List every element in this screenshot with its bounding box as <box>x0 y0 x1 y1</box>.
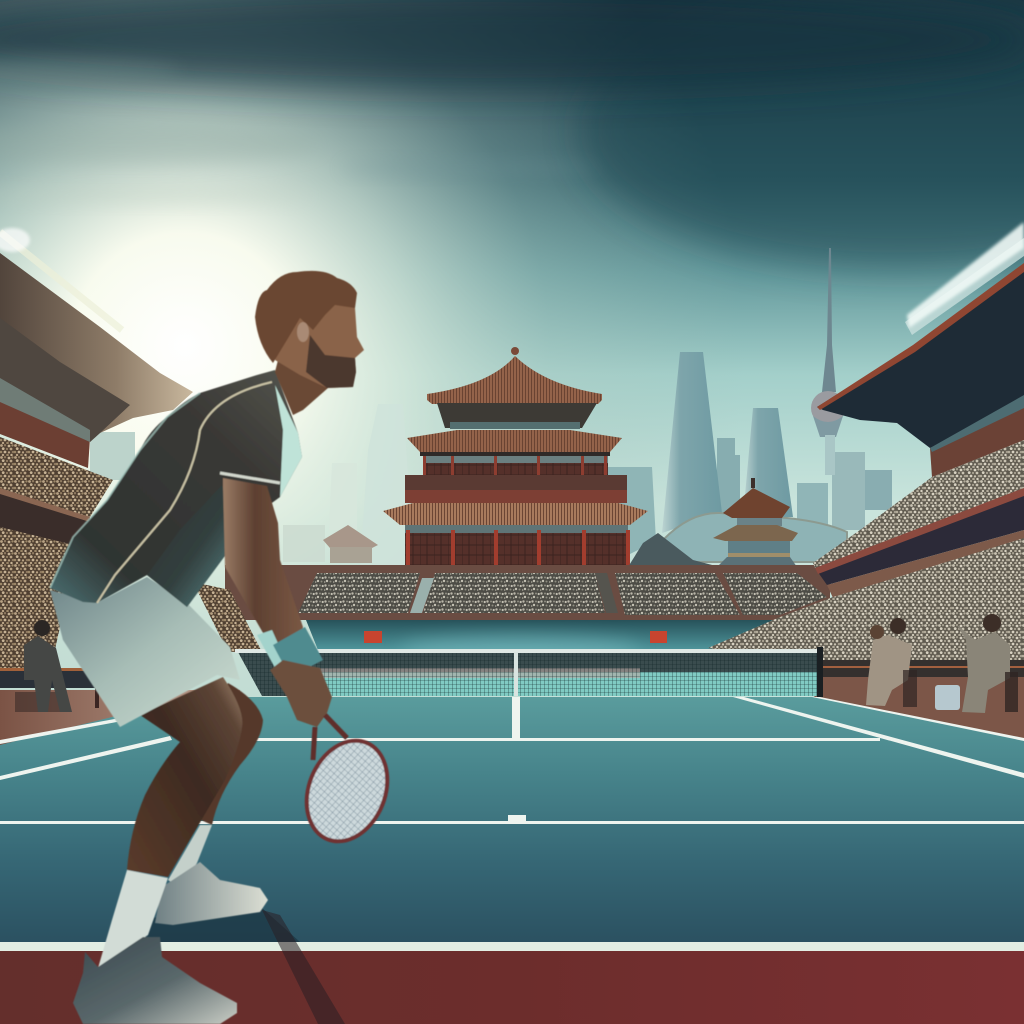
small pagoda left <box>323 525 378 563</box>
hand <box>270 660 332 727</box>
side ground strips <box>0 677 1024 745</box>
back shoe <box>155 862 268 925</box>
back leg <box>190 683 263 825</box>
central teal wall with flags <box>306 620 780 664</box>
sky background <box>0 0 1024 720</box>
shirt lower front panel <box>147 485 235 607</box>
wristband light strip <box>257 630 290 670</box>
neck <box>275 360 328 415</box>
shirt piping <box>97 382 272 603</box>
front shoe <box>73 937 237 1024</box>
left spectators and bench <box>0 620 99 712</box>
glass dome <box>663 513 847 562</box>
tennis player <box>50 271 402 1024</box>
right stadium building <box>930 400 1024 477</box>
left stadium building <box>0 395 90 468</box>
clouds <box>0 58 600 203</box>
hair <box>255 271 357 363</box>
face <box>275 300 364 388</box>
ear <box>297 322 309 342</box>
racket <box>292 715 402 853</box>
front leg <box>127 677 242 877</box>
player shadow <box>140 908 345 1024</box>
shorts <box>50 577 240 727</box>
tennis net <box>235 647 823 697</box>
right spectators and bench <box>823 614 1024 713</box>
left stadium roof <box>0 228 193 442</box>
wristband <box>273 627 323 677</box>
front sock <box>98 870 168 968</box>
court lines <box>0 697 1024 951</box>
distant skyline left <box>90 404 410 566</box>
sleeve cuff <box>220 473 280 483</box>
left crowd <box>0 437 262 672</box>
broadcast tower <box>811 248 845 475</box>
shirt <box>50 370 302 607</box>
right crowd <box>708 440 1024 673</box>
central pagoda <box>383 347 648 566</box>
shirt rim light <box>50 393 200 588</box>
distant skyline right <box>608 352 892 560</box>
back sock <box>168 825 212 888</box>
low dark roof building <box>628 533 716 567</box>
central stands <box>225 565 830 620</box>
bottom red band <box>0 951 1024 1024</box>
beard <box>306 335 356 388</box>
collar placket <box>275 385 302 497</box>
small pagoda right <box>713 478 798 567</box>
right stadium roof <box>817 222 1024 452</box>
arm <box>223 478 303 645</box>
tennis court <box>0 697 1024 950</box>
